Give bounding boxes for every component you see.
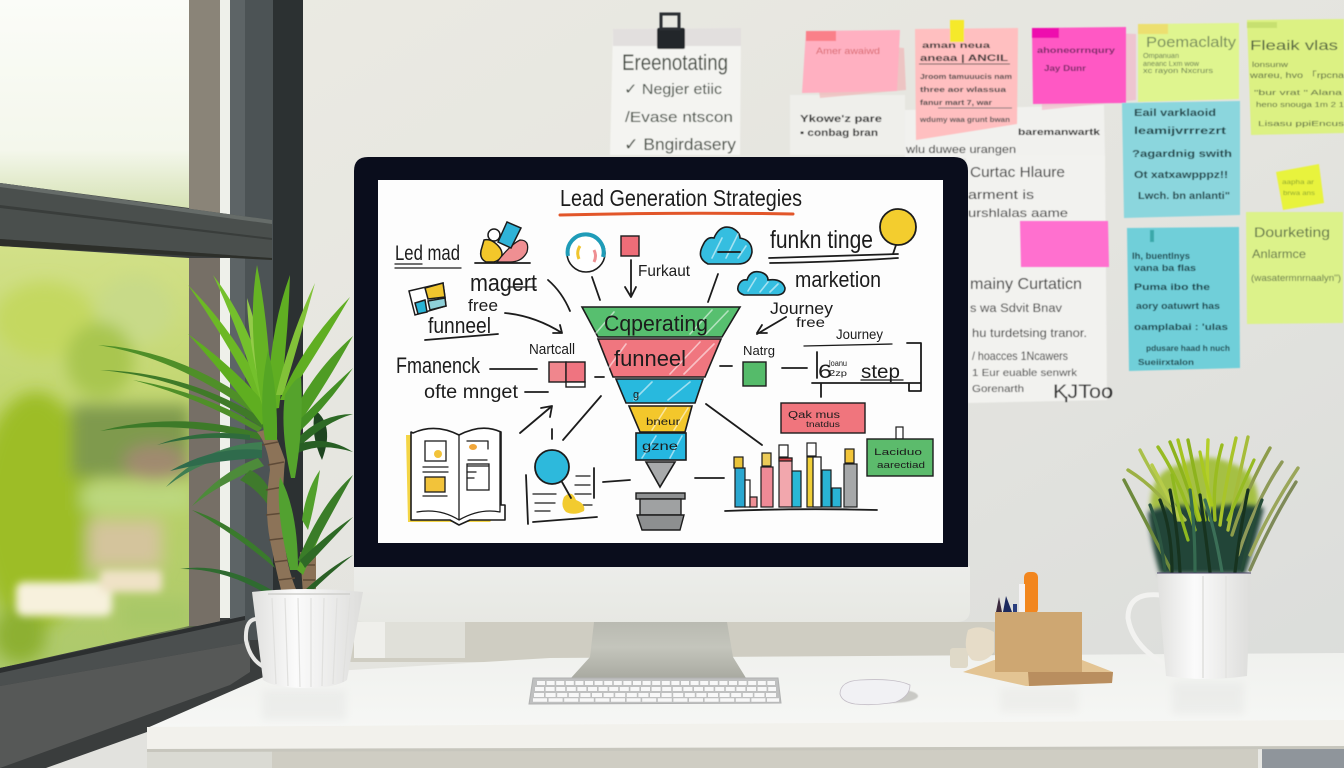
step box: 2zp [829,369,848,378]
note: lime sticky lower: (wasatermnrnaalyn") [1251,273,1341,283]
icon: person and tablet [475,222,530,263]
monitor chin [354,566,970,622]
note: white checklist paper with clip [610,14,741,155]
monitor stand [571,622,746,678]
note: salmon sticky: aman neua [922,40,990,50]
screen [378,180,943,543]
note: salmon sticky: Jroom tamuuucis nam [920,72,1012,81]
note: lime sticky lower [1246,212,1343,324]
left pot [246,589,363,688]
right plant [1124,437,1298,574]
step box: 6 [818,362,832,383]
handwritten labels left: Led mad [395,242,460,265]
handwritten labels left: magert [470,270,537,297]
note: blue sticky lower: Ih, buentlnys [1132,251,1190,262]
handwritten labels right [743,226,898,358]
note: magenta sticky: ahoneorrnqury [1037,46,1116,55]
note: white papers behind sticky notes: 1 Eur euable senwrk [972,367,1078,379]
screen title: Lead Generation Strategies [560,185,802,211]
red label box [781,403,865,433]
icon: clouds [700,227,785,295]
note: salmon sticky: wdumy waa grunt bwan [919,117,1010,124]
note: white papers behind sticky notes: ▪ conbag bran [800,128,878,139]
funnel: gzne [642,439,678,453]
note: pink sticky [802,30,906,98]
note: lime sticky top [1138,23,1239,102]
note: white papers behind sticky notes: wlu duwee urangen [905,144,1016,156]
mouse [840,680,918,705]
icon: progress ring [567,234,605,272]
note: small yellow sticky [1276,164,1324,210]
icon: yellow balloon [880,209,916,254]
note: white checklist paper with clip: Ereenotating [622,50,728,75]
wall shadow under monitor [303,622,1003,662]
pink squares [549,362,585,387]
funnel: Cqperating [604,311,708,336]
step box: step [861,362,900,383]
right pot [1128,573,1251,679]
handwritten labels left: Fmanenck [396,353,481,378]
connector arrows [505,274,807,482]
monitor [354,157,970,678]
funnel [582,307,740,487]
handwritten labels right: Journey [770,299,834,318]
note: white papers behind sticky notes: s wa Sdvit Bnav [970,303,1062,315]
note: white checklist paper with clip: /Evase ntscon [625,109,733,126]
yellow-green grass mass [1150,458,1259,515]
note: blue sticky upper: Eail varklaoid [1134,108,1216,119]
note: blue sticky lower [1127,227,1240,371]
note: pink sticky: Amer awaiwd [816,46,880,56]
icon: gray tray [636,493,685,530]
note: white papers behind sticky notes: Ykowe'z pare [800,114,883,125]
note: lime sticky right: lonsunw [1252,60,1289,69]
red label box: tnatdus [806,420,840,429]
green label box: aarectiad [877,460,925,470]
note: lime sticky top: Poemaclalty [1146,34,1237,51]
handwritten labels left: ofte mnget [424,382,519,403]
icon: red square with arrow [621,236,691,297]
handwritten labels left: free [468,296,498,315]
green square [743,362,766,386]
note: blue sticky lower: oamplabai : 'ulas [1134,322,1228,332]
note: white papers behind sticky notes: Gorenarth [972,384,1024,395]
note: small yellow sticky: aapha ar [1282,180,1314,186]
note: small yellow sticky: brwa ans [1283,191,1315,197]
note: blue sticky upper: Ot xatxawpppz!! [1134,169,1228,181]
dark grass mass [1148,504,1264,574]
note: salmon sticky: fanur mart 7, war [920,98,992,107]
note: white papers behind sticky notes: mainy Curtaticn [970,276,1082,293]
handwritten labels left: funneel [428,313,491,338]
icon: red square with arrow: Furkaut [638,263,691,280]
note: lime sticky top: xc rayon Nxcrurs [1143,68,1214,75]
note: blue sticky lower: aory oatuwrt has [1136,301,1220,311]
note: white papers behind sticky notes: Curtac Hlaure [970,164,1065,181]
green label box [867,427,933,476]
icon: open book [406,428,505,525]
funnel: bneur [646,417,681,428]
desk [147,653,1344,768]
monitor bezel [354,157,968,567]
note: lime sticky right: Fleaik vlas [1250,37,1338,53]
handwritten labels left: Nartcall [529,341,575,358]
step box: loanu [829,359,847,368]
left plant [98,265,353,596]
note: white papers behind sticky notes: hu turdetsing tranor. [972,326,1087,340]
note: blue sticky lower: Sueiirxtalon [1138,357,1194,367]
note: magenta sticky [1032,27,1136,110]
plant trunk [257,428,316,594]
bar chart [725,443,877,511]
handwritten labels right: free [796,314,825,330]
note: lime sticky right: heno snouga 1m 2 1 [1256,100,1344,109]
handwritten labels right: marketion [795,267,881,292]
note: lime sticky right: Lisasu ppiEncus [1258,119,1344,128]
note: salmon sticky: aneaa | ANCIL [920,53,1009,63]
desk organizer with pens [950,572,1113,686]
note: white papers behind sticky notes: baremanwartk [1018,127,1101,137]
note: blue sticky upper: ?agardnig swith [1132,148,1232,160]
handwritten labels left [395,242,575,403]
icon: palette card [409,283,446,315]
note: white checklist paper with clip: ✓ Bngirdasery [624,135,737,154]
keyboard [529,678,781,704]
note: lime sticky lower: Dourketing [1254,224,1330,240]
note: white papers behind sticky notes: / hoacces 1Ncawers [972,349,1068,363]
back thin leaves [98,345,285,596]
note: white papers behind sticky notes: urshlalas aame [968,206,1068,220]
note: blue sticky lower: Puma ibo the [1134,282,1210,292]
note: blue sticky upper: leamijvrrrezrt [1134,125,1227,137]
window with garden view [0,0,303,768]
note: blue sticky upper: Lwch. bn anlanti" [1138,191,1230,202]
handwritten labels right: Natrg [743,343,775,358]
icon: magnifier over document [526,450,597,524]
note: lime sticky top: Ompanuan [1143,53,1179,60]
note: blue sticky upper [1122,101,1240,218]
note: lime sticky top: aneanc Lxm wow [1143,61,1200,68]
floor under window [46,732,270,768]
note: lime sticky lower: Anlarmce [1252,247,1306,261]
red label box: Qak mus [788,410,840,421]
note: magenta sticky: Jay Dunr [1044,64,1086,73]
funnel: g [633,389,639,401]
note: lime sticky right: wareu, hvo 「rpcna [1249,70,1344,80]
green label box: Laciduo [874,447,922,457]
handwritten labels right: funkn tinge [770,226,873,254]
note: white papers behind sticky notes: ⱩJToo [1053,382,1113,403]
handwritten labels right: Journey [836,326,883,342]
note: white papers behind sticky notes: arment is [968,187,1035,202]
note: blue sticky lower: vana ba flas [1134,263,1196,273]
step box [812,343,921,397]
funnel: funneel [614,346,686,371]
note: blue sticky lower: pdusare haad h nuch [1146,344,1230,353]
note: white papers behind sticky notes [790,95,1113,403]
note: salmon sticky: three aor wlassua [920,85,1007,94]
note: lime sticky right: "bur vrat " Alana [1254,88,1343,97]
note: lime sticky right [1247,19,1344,135]
note: magenta sticky middle [1020,221,1109,267]
note: salmon sticky [915,20,1018,140]
note: white checklist paper with clip: ✓ Negjer etiic [624,81,723,98]
front leaves [188,265,353,594]
